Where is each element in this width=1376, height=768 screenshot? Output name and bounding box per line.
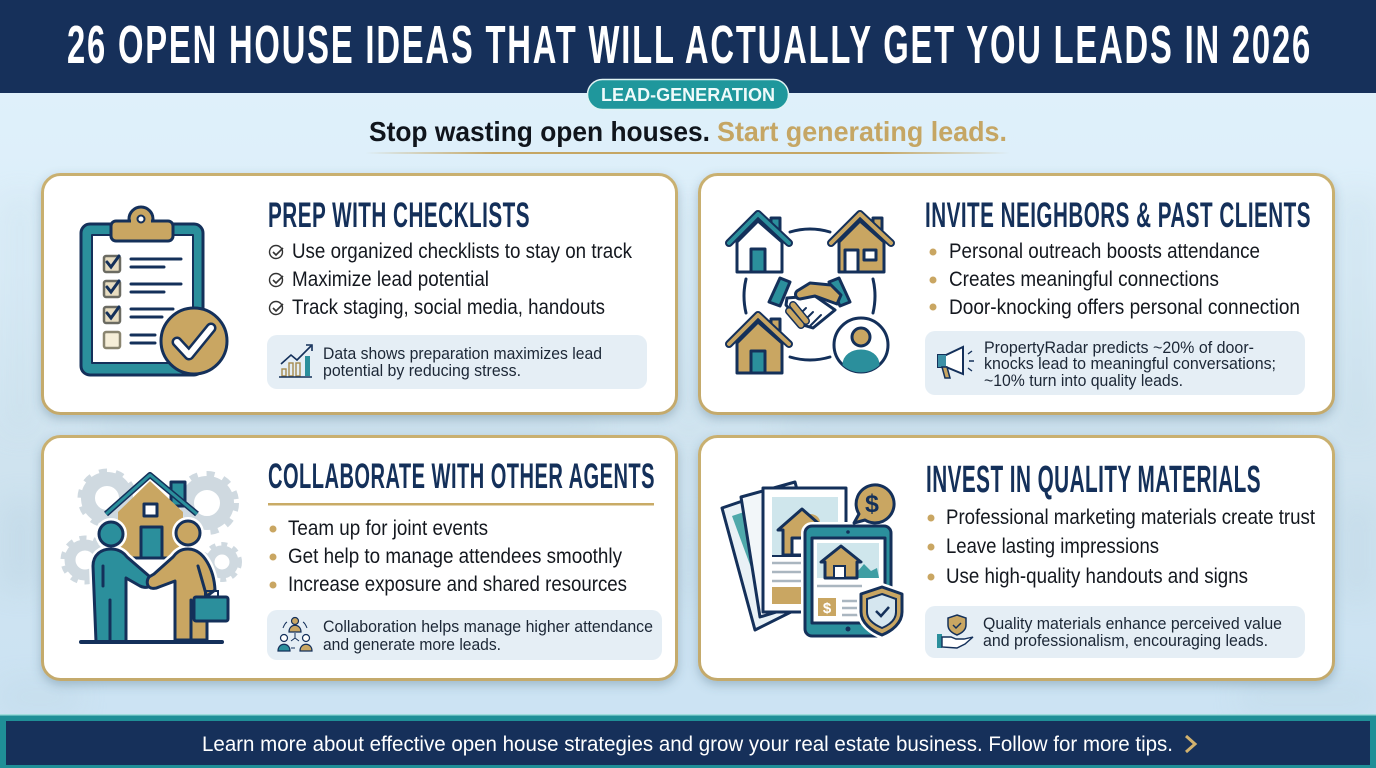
- bullet list: [270, 517, 627, 596]
- icon: neighborhood network: [729, 214, 891, 373]
- heading: PREP WITH CHECKLISTS: [268, 196, 530, 235]
- icon: shield in hand: [937, 615, 973, 648]
- callout: [267, 610, 662, 660]
- gold divider: [268, 503, 654, 506]
- bullet list: Personal outreach boosts attendance: [949, 240, 1260, 263]
- checklist: Maximize lead potential: [292, 268, 489, 291]
- callout: knocks lead to meaningful conversations;: [984, 355, 1276, 373]
- bullet list: Creates meaningful connections: [949, 268, 1219, 291]
- callout: Collaboration helps manage higher attendance: [323, 618, 653, 636]
- panel: prep with checklists: [42, 174, 676, 414]
- bullet list: Leave lasting impressions: [946, 535, 1159, 558]
- icon: team: [278, 618, 312, 651]
- bullet list: [928, 506, 1315, 588]
- callout: potential by reducing stress.: [323, 362, 521, 380]
- icon: growth chart: [279, 345, 312, 377]
- icon: arrow: [1186, 736, 1195, 752]
- bullet list: Door-knocking offers personal connection: [949, 296, 1300, 319]
- callout: [925, 606, 1305, 658]
- callout: [267, 335, 647, 389]
- bullet list: Get help to manage attendees smoothly: [288, 545, 622, 568]
- bullet list: [930, 240, 1300, 319]
- subtitle: [365, 116, 1010, 154]
- category pill: [588, 80, 788, 110]
- callout: PropertyRadar predicts ~20% of door-: [984, 339, 1254, 357]
- callout: Quality materials enhance perceived value: [983, 615, 1282, 633]
- header banner: [0, 0, 1376, 93]
- subtitle: Stop wasting open houses.: [369, 116, 710, 147]
- bullet list: Professional marketing materials create trust: [946, 506, 1315, 529]
- callout: Data shows preparation maximizes lead: [323, 345, 602, 363]
- bullet list: Increase exposure and shared resources: [288, 573, 627, 596]
- callout: and professionalism, encouraging leads.: [983, 632, 1268, 650]
- checklist: Track staging, social media, handouts: [292, 296, 605, 319]
- footer banner: [0, 714, 1376, 768]
- panel: collaborate with other agents: [42, 436, 676, 680]
- icon: agents shaking hands: [63, 471, 240, 642]
- callout: and generate more leads.: [323, 636, 501, 654]
- bullet list: Use high-quality handouts and signs: [946, 565, 1248, 588]
- callout: ~10% turn into quality leads.: [984, 372, 1183, 390]
- icon: megaphone: [938, 347, 974, 378]
- category pill: LEAD-GENERATION: [601, 85, 775, 105]
- icon: marketing materials: $: [823, 600, 832, 617]
- heading: COLLABORATE WITH OTHER AGENTS: [268, 457, 655, 496]
- icon: marketing materials: [722, 482, 902, 636]
- icon: clipboard with check: [81, 207, 227, 375]
- callout: [925, 331, 1305, 395]
- bullet list: Team up for joint events: [288, 517, 488, 540]
- icon: marketing materials: $: [865, 490, 879, 518]
- subtitle: Start generating leads.: [717, 116, 1007, 147]
- checklist: [270, 240, 632, 319]
- panel: invite neighbors and past clients: [700, 174, 1334, 414]
- footer text: Learn more about effective open house strategies and grow your real estate business. Follow for more tips.: [202, 733, 1173, 756]
- panel: invest in quality materials: [700, 436, 1334, 680]
- checklist: Use organized checklists to stay on track: [292, 240, 632, 263]
